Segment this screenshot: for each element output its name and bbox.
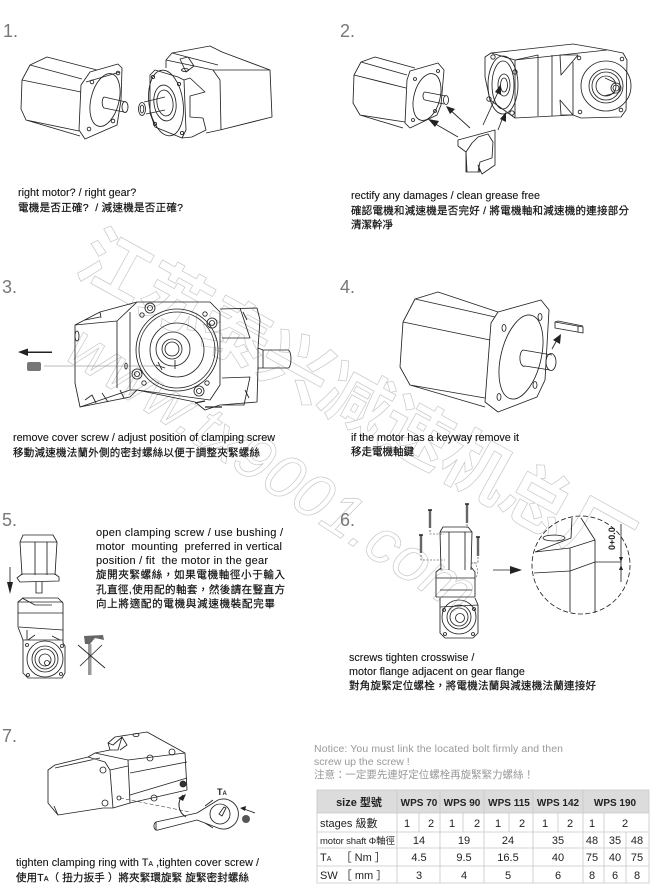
step 7 caption: tighten clamping ring with TA ,tighten cover screw /: [16, 857, 259, 869]
step 5 number: 5.: [2, 510, 17, 530]
table header: WPS 115: [488, 798, 530, 809]
table row: stages: 2: [474, 818, 480, 830]
table row: stages: 2: [428, 818, 434, 830]
table row: TA: 75: [586, 852, 598, 864]
table row: motor shaft: [320, 835, 643, 847]
step 6 caption: [349, 652, 596, 692]
arrow: to detail: [493, 566, 522, 574]
step 7 illustration: tightening with wrench: [48, 732, 238, 830]
table row: motor shaft: 19: [458, 835, 470, 847]
table row: SW: 4: [461, 870, 467, 882]
step 2 arrows: [428, 84, 506, 137]
table row: motor shaft: 48: [631, 835, 643, 847]
detail circle: flange gap: 0+0.0: [607, 527, 617, 550]
step 3 caption: [13, 432, 275, 459]
table row: stages: 2: [567, 818, 573, 830]
table row: motor shaft: 35: [552, 835, 564, 847]
table row: stages: 2: [519, 818, 525, 830]
step 5 illustration: vertical mounting: [17, 535, 65, 678]
step 6 caption: screws tighten crosswise /: [349, 652, 474, 664]
step 5 text: position / fit the motor in the gear: [96, 555, 268, 567]
table header: [336, 795, 637, 809]
table row: TA: TA ［ Nm ］: [320, 851, 386, 864]
notice: 注意：一定要先連好定位螺栓再旋緊緊力螺絲！: [314, 768, 534, 781]
table header: WPS 90: [444, 798, 481, 809]
notice: screw up the screw !: [314, 756, 410, 768]
step 2 number: 2.: [340, 21, 355, 41]
watermark: 江苏泰兴减速机总厂: [63, 201, 655, 590]
step 5 text: [96, 527, 286, 610]
step 4 caption: if the motor has a keyway remove it: [351, 432, 519, 444]
step 2 illustration: cleaning: [353, 44, 631, 174]
step 3 caption: remove cover screw / adjust position of clamping screw: [13, 432, 275, 444]
table row: TA: 40: [552, 852, 564, 864]
table row: stages: 2: [622, 818, 628, 830]
step 5 text: 向上將適配的電機與減速機裝配完畢: [96, 597, 275, 610]
table row: motor shaft: 14: [413, 835, 425, 847]
step 3 illustration: gear front with screws: [44, 302, 291, 410]
step 6 number: 6.: [340, 510, 355, 530]
step 5 text: motor mounting preferred in vertical: [96, 541, 282, 553]
table row: SW: 6: [555, 870, 561, 882]
step 2 caption: [351, 190, 630, 231]
table row: TA: 4.5: [411, 852, 427, 864]
table row: SW: 6: [612, 870, 618, 882]
step 4 number: 4.: [340, 277, 355, 297]
table header: WPS 70: [401, 798, 438, 809]
step 3 caption: 移動減速機法蘭外側的密封螺絲以便于調整夾緊螺絲: [13, 446, 260, 459]
step 1 illustration: motor and gear: [21, 46, 272, 139]
step 5 text: 孔直徑,使用配的軸套，然後請在豎直方: [96, 583, 285, 596]
step 4 illustration: motor with keyway: [400, 292, 583, 412]
table row: motor shaft: 24: [502, 835, 514, 847]
detail circle: flange gap: [532, 516, 630, 614]
step 1 caption: [18, 187, 183, 214]
table row: SW: 5: [505, 870, 511, 882]
notice: [314, 743, 563, 781]
table row: TA: 40: [609, 852, 621, 864]
table row: TA: 75: [631, 852, 643, 864]
table row: SW: 8: [589, 870, 595, 882]
table row: motor shaft: 35: [609, 835, 621, 847]
icon: cover screw and removal arrow: [18, 348, 52, 371]
table row: TA: 9.5: [456, 852, 472, 864]
step 6 caption: 對角旋緊定位螺栓，將電機法蘭與減速機法蘭連接好: [349, 679, 596, 692]
step 1 number: 1.: [3, 21, 18, 41]
table row: stages: [320, 816, 628, 830]
label: TA and wrench arrows: TA: [217, 787, 228, 797]
step 5 text: 旋開夾緊螺絲，如果電機軸徑小于輸入: [96, 568, 286, 581]
table row: SW: 8: [634, 870, 640, 882]
table row: SW: [320, 869, 640, 882]
step 3 number: 3.: [2, 277, 17, 297]
step 2 caption: rectify any damages / clean grease free: [351, 190, 540, 202]
table row: stages: 1: [404, 818, 410, 830]
table row: stages: 1: [542, 818, 548, 830]
step 1 caption: right motor? / right gear?: [18, 187, 136, 199]
table row: stages: 1: [589, 818, 595, 830]
table: specifications: [317, 790, 649, 883]
step 4 caption: 移走電機軸鍵: [351, 445, 414, 458]
arrow: down: [7, 567, 13, 594]
table row: stages: 1: [449, 818, 455, 830]
step 7 caption: 使用TA（ 扭力扳手 ）將夾緊環旋緊 旋緊密封螺絲: [16, 871, 250, 884]
step 7 caption: [16, 857, 259, 884]
table row: TA: 16.5: [497, 852, 519, 864]
table row: stages: stages 級數: [320, 816, 377, 830]
step 4 caption: [351, 432, 519, 458]
table row: SW: 3: [416, 870, 422, 882]
step 7 number: 7.: [2, 726, 17, 746]
step 6 illustration: screws crosswise: [419, 504, 480, 638]
table header: size 型號: [336, 795, 382, 809]
notice: Notice: You must link the located bolt firmly and then: [314, 743, 563, 755]
step 1 caption: 電機是否正確? / 減速機是否正確?: [18, 201, 183, 214]
icon: no hammer: [78, 635, 105, 675]
step 6 caption: motor flange adjacent on gear flange: [349, 666, 525, 678]
table row: stages: 1: [495, 818, 501, 830]
table row: TA: [320, 851, 643, 864]
table row: motor shaft: 48: [586, 835, 598, 847]
arrow: remove key: [552, 334, 561, 349]
table row: SW: SW ［ mm ］: [320, 869, 387, 882]
step 2 caption: 清潔幹凈: [351, 218, 393, 231]
table row: motor shaft: motor shaft Φ軸徑: [320, 835, 395, 847]
step 5 text: open clamping screw / use bushing /: [96, 527, 284, 539]
table header: WPS 190: [594, 798, 637, 809]
label: TA and wrench arrows: [178, 787, 255, 823]
step 2 caption: 確認電機和減速機是否完好 / 將電機軸和減速機的連接部分: [351, 204, 630, 217]
watermark: www.tx9001.com: [55, 312, 490, 627]
table header: WPS 142: [537, 798, 580, 809]
